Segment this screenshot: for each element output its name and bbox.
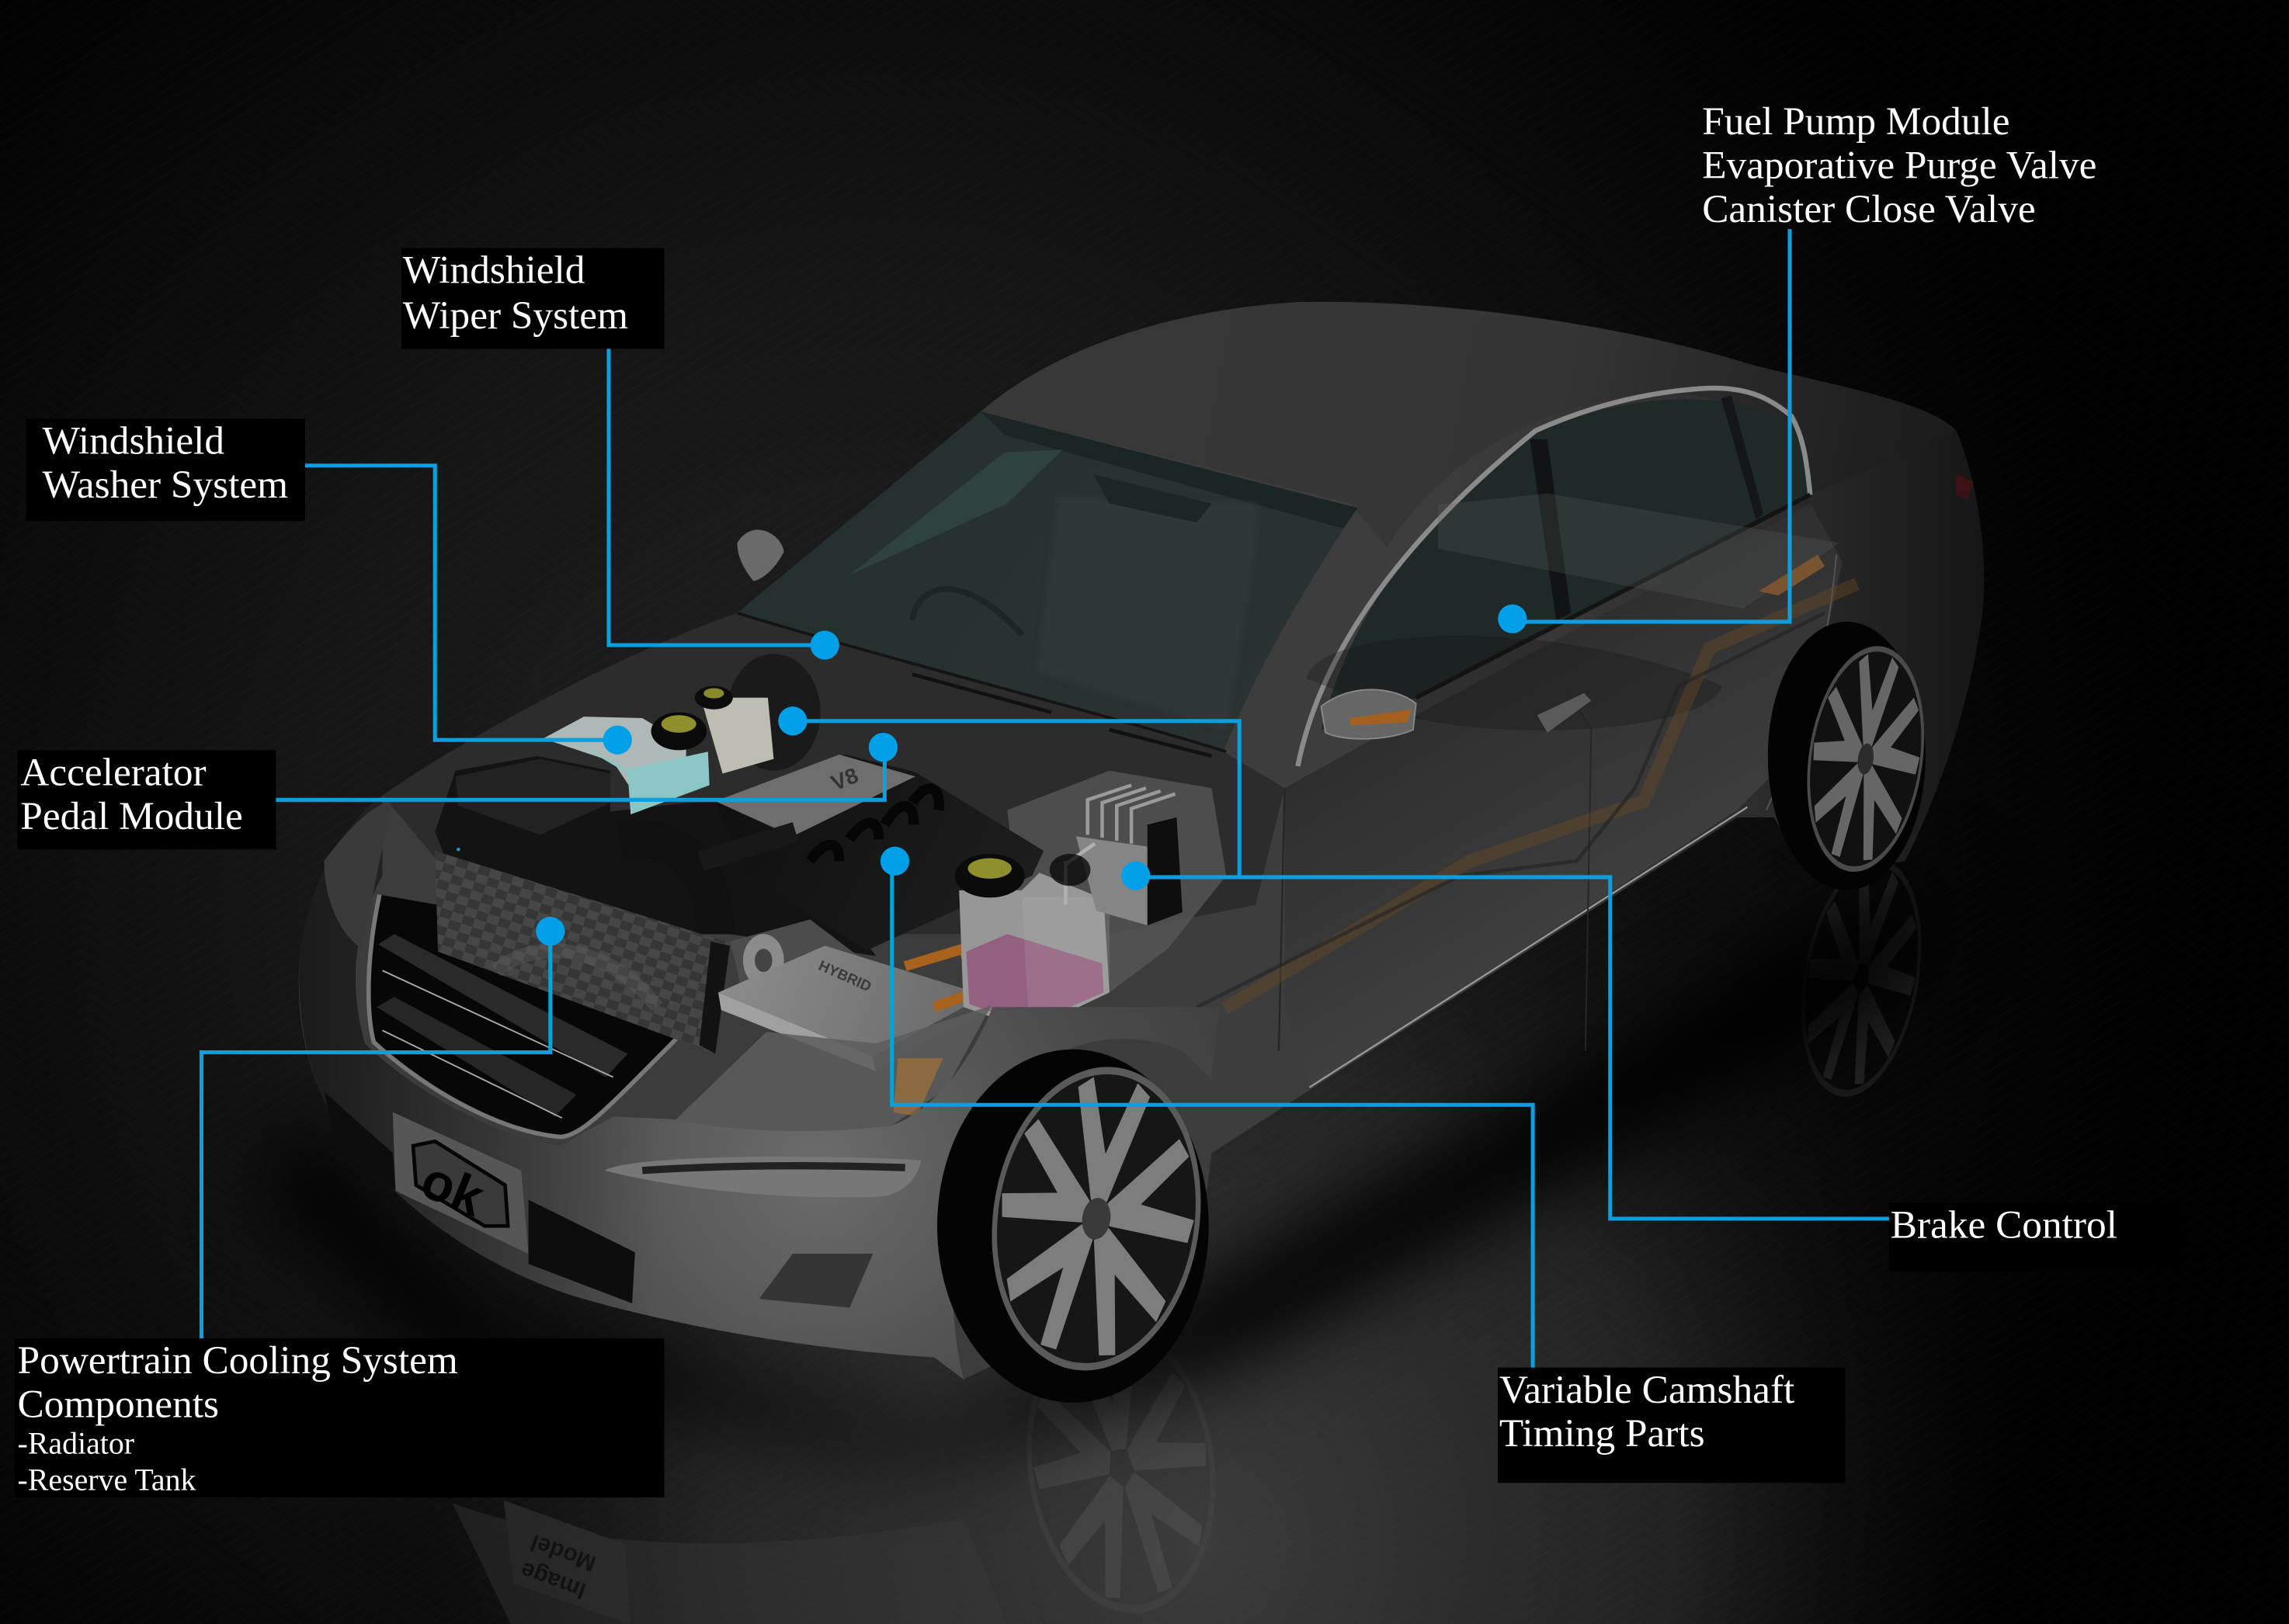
label: variable camshaft timing parts: Variable Camshaft: [1499, 1368, 1794, 1412]
label: accelerator pedal module: Pedal Module: [20, 794, 243, 838]
door panel: [1284, 504, 1843, 1088]
stray blue marker: [457, 848, 460, 851]
bumper air dam: [604, 1157, 921, 1197]
front bumper: [299, 796, 1219, 1379]
callout line: accelerator: [276, 733, 898, 800]
car reflection on floor: Image: [517, 1556, 589, 1604]
car reflection on floor: [453, 853, 1936, 1624]
license plate: ok: [413, 1150, 492, 1228]
car reflection on floor: Model: [527, 1529, 599, 1577]
master cylinder: [651, 686, 773, 773]
label: powertrain cooling system components: -Radiator: [18, 1426, 134, 1461]
callout line: wiper: [609, 349, 839, 660]
callout line: cooling: [201, 917, 564, 1338]
label: variable camshaft timing parts: Timing Parts: [1499, 1411, 1705, 1456]
front wheel: [937, 1050, 1217, 1403]
hybrid inverter box: HYBRID: [816, 957, 874, 994]
orange coolant pipe: [905, 949, 1007, 1007]
grille: [369, 895, 689, 1137]
label: windshield washer system: Windshield: [43, 419, 224, 463]
coolant tanks: [955, 854, 1110, 1030]
intake hose: [620, 832, 796, 934]
door mirror: [1321, 689, 1416, 739]
label: windshield washer system: [26, 419, 305, 521]
orange and dark cable runs: [1197, 584, 1857, 1008]
label: windshield wiper system: [401, 248, 664, 349]
wiper: [912, 675, 1211, 756]
label: brake control: Brake Control: [1891, 1202, 2117, 1247]
pulleys: [730, 919, 891, 1000]
hybrid inverter box: [718, 946, 985, 1071]
fog lamp: [759, 1254, 873, 1308]
side windows: [1297, 388, 1839, 766]
roof: [981, 302, 1956, 547]
label: windshield wiper system: Wiper System: [403, 293, 628, 338]
air box: [435, 756, 876, 956]
label: variable camshaft timing parts: [1498, 1368, 1845, 1483]
left door mirror: [737, 529, 784, 581]
car ground shadow: [262, 876, 1956, 1459]
label: powertrain cooling system components: -Reserve Tank: [18, 1463, 196, 1497]
car body silhouette: [299, 302, 1984, 1379]
label: windshield washer system: Washer System: [43, 463, 288, 507]
brake control unit: [1050, 786, 1183, 925]
callout line: fuel: [1498, 229, 1790, 633]
label: powertrain cooling system components: Powertrain Cooling System: [18, 1338, 458, 1383]
hood: [383, 613, 1284, 934]
label: brake control: [1889, 1202, 2181, 1272]
callout line: brake control: [1121, 861, 1889, 1219]
cowl line: [737, 613, 1226, 751]
label: fuel pump, purge valve, canister valve: Fuel Pump Module: [1702, 99, 2009, 144]
label: accelerator pedal module: [18, 750, 276, 849]
headlight: [676, 1005, 992, 1131]
callout line: washer: [305, 466, 632, 755]
brake booster: [727, 654, 821, 771]
label: powertrain cooling system components: [15, 1338, 664, 1497]
radiator: [435, 851, 730, 1053]
lower grille: [324, 1091, 635, 1303]
callout line: camshaft: [881, 847, 1533, 1368]
door details: [1279, 554, 1836, 1088]
label: fuel pump, purge valve, canister valve: Evaporative Purge Valve: [1702, 143, 2096, 187]
label: fuel pump, purge valve, canister valve: Canister Close Valve: [1702, 187, 2036, 231]
engine bay right side: [1007, 771, 1226, 992]
ghost battery pack: [1438, 493, 1839, 609]
label: windshield wiper system: Windshield: [403, 248, 585, 293]
engine cover: V8: [828, 762, 862, 796]
label: accelerator pedal module: Accelerator: [20, 750, 207, 795]
label: fuel pump, purge valve, canister valve: [1702, 99, 2096, 231]
rear wheel: [1768, 622, 1936, 890]
callout line: brake branch: [778, 706, 1239, 877]
washer reservoir: [543, 717, 710, 814]
car: [299, 302, 1984, 1403]
engine cover: [715, 755, 1044, 950]
windshield: [737, 411, 1357, 751]
license plate: [393, 1112, 529, 1254]
left headlight: [324, 803, 391, 949]
label: powertrain cooling system components: Components: [18, 1383, 219, 1427]
tail lamp: [1956, 474, 1974, 499]
